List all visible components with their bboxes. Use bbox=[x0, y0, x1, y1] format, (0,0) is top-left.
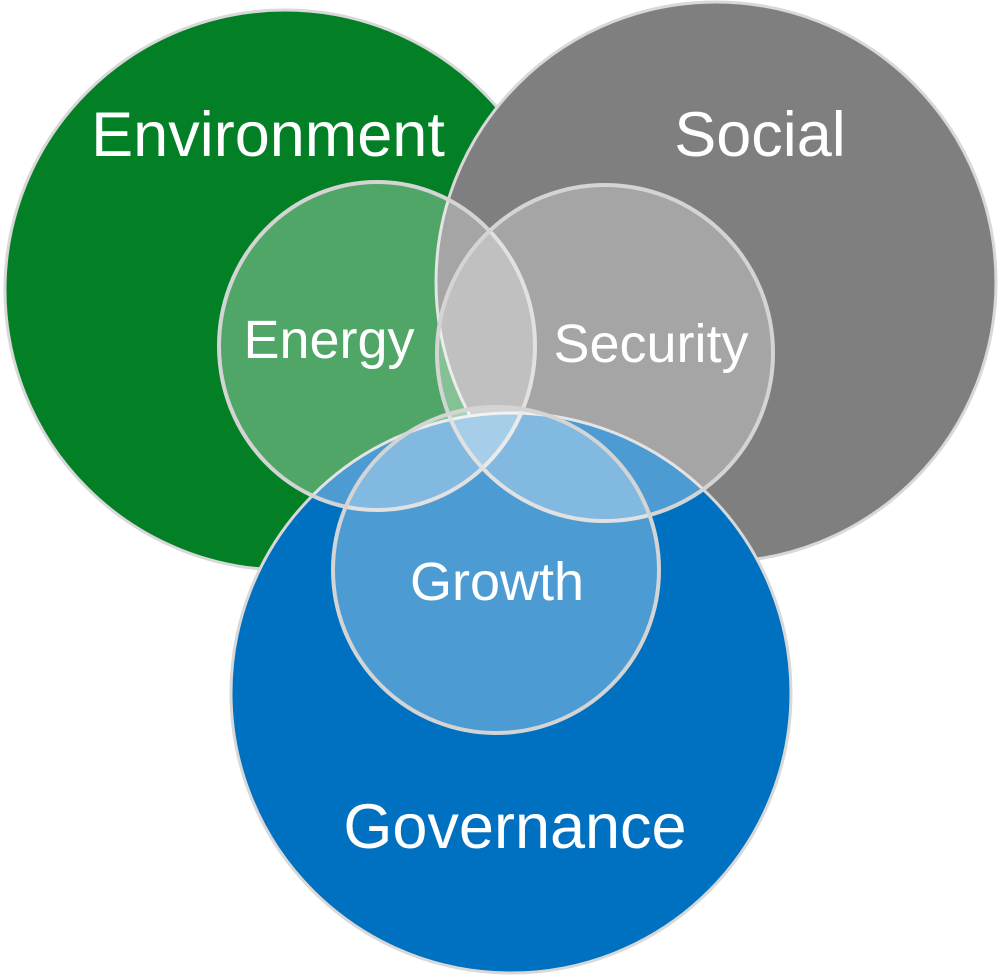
label: Energy: Energy bbox=[243, 310, 415, 370]
heading: Social: Social bbox=[674, 100, 846, 170]
heading: Governance: Governance bbox=[343, 792, 687, 862]
circle: Security bbox=[437, 185, 773, 521]
circle: Energy bbox=[219, 182, 535, 510]
heading: Environment: Environment bbox=[91, 100, 445, 170]
label: Growth: Growth bbox=[410, 552, 584, 612]
label: Security: Security bbox=[553, 314, 749, 374]
circle: Growth bbox=[333, 407, 659, 733]
